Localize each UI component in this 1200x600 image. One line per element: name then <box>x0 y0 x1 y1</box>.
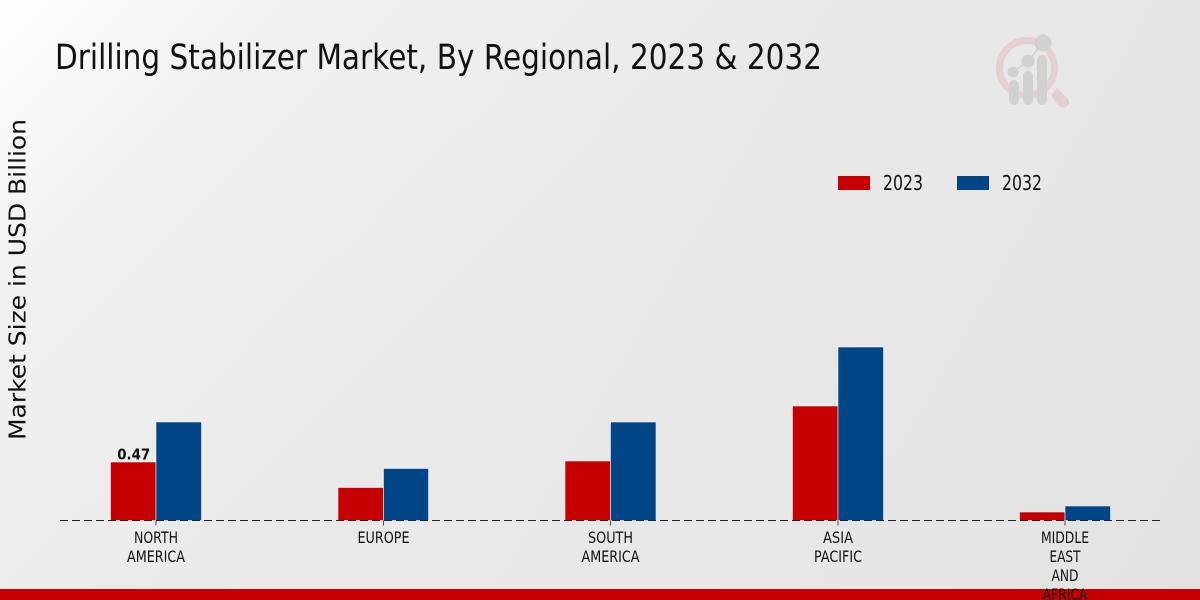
bars: Middle East and Africa <box>1020 506 1110 520</box>
y axis label: Market Size in USD Billion <box>6 119 32 440</box>
label: Asia Pacific: ASIA <box>823 528 853 547</box>
label: Middle East and Africa <box>1041 528 1089 600</box>
bars: North America <box>110 422 202 520</box>
legend <box>838 171 1042 195</box>
label: South America: AMERICA <box>582 547 640 566</box>
label: Middle East and Africa: MIDDLE <box>1041 528 1089 547</box>
icon: magnifier watermark logo <box>1000 34 1069 108</box>
label: North America: AMERICA <box>127 547 185 566</box>
label: South America <box>582 528 640 566</box>
x axis baseline <box>60 520 1160 522</box>
value label: 0.47: 0.47 <box>117 445 150 463</box>
footer bar <box>0 589 1200 600</box>
legend item: 2023: 2023 <box>883 171 923 195</box>
bar chart <box>60 347 1160 526</box>
legend item: 2023 <box>838 171 923 195</box>
label: North America <box>127 528 185 566</box>
label: South America: SOUTH <box>588 528 633 547</box>
label: Europe: EUROPE <box>358 528 410 547</box>
bars: Asia Pacific <box>792 347 884 520</box>
label: Middle East and Africa: AND <box>1052 566 1078 585</box>
label: Asia Pacific: PACIFIC <box>814 547 862 566</box>
label: Middle East and Africa: EAST <box>1050 547 1081 566</box>
category labels <box>127 528 1089 600</box>
bars: Europe <box>338 468 428 520</box>
legend item: 2032 <box>957 171 1042 195</box>
label: Asia Pacific <box>814 528 862 566</box>
label: North America: NORTH <box>134 528 178 547</box>
bars: South America <box>565 422 656 520</box>
legend item: 2032: 2032 <box>1002 171 1042 195</box>
title: Drilling Stabilizer Market, By Regional, 2023 & 2032 <box>55 38 822 78</box>
